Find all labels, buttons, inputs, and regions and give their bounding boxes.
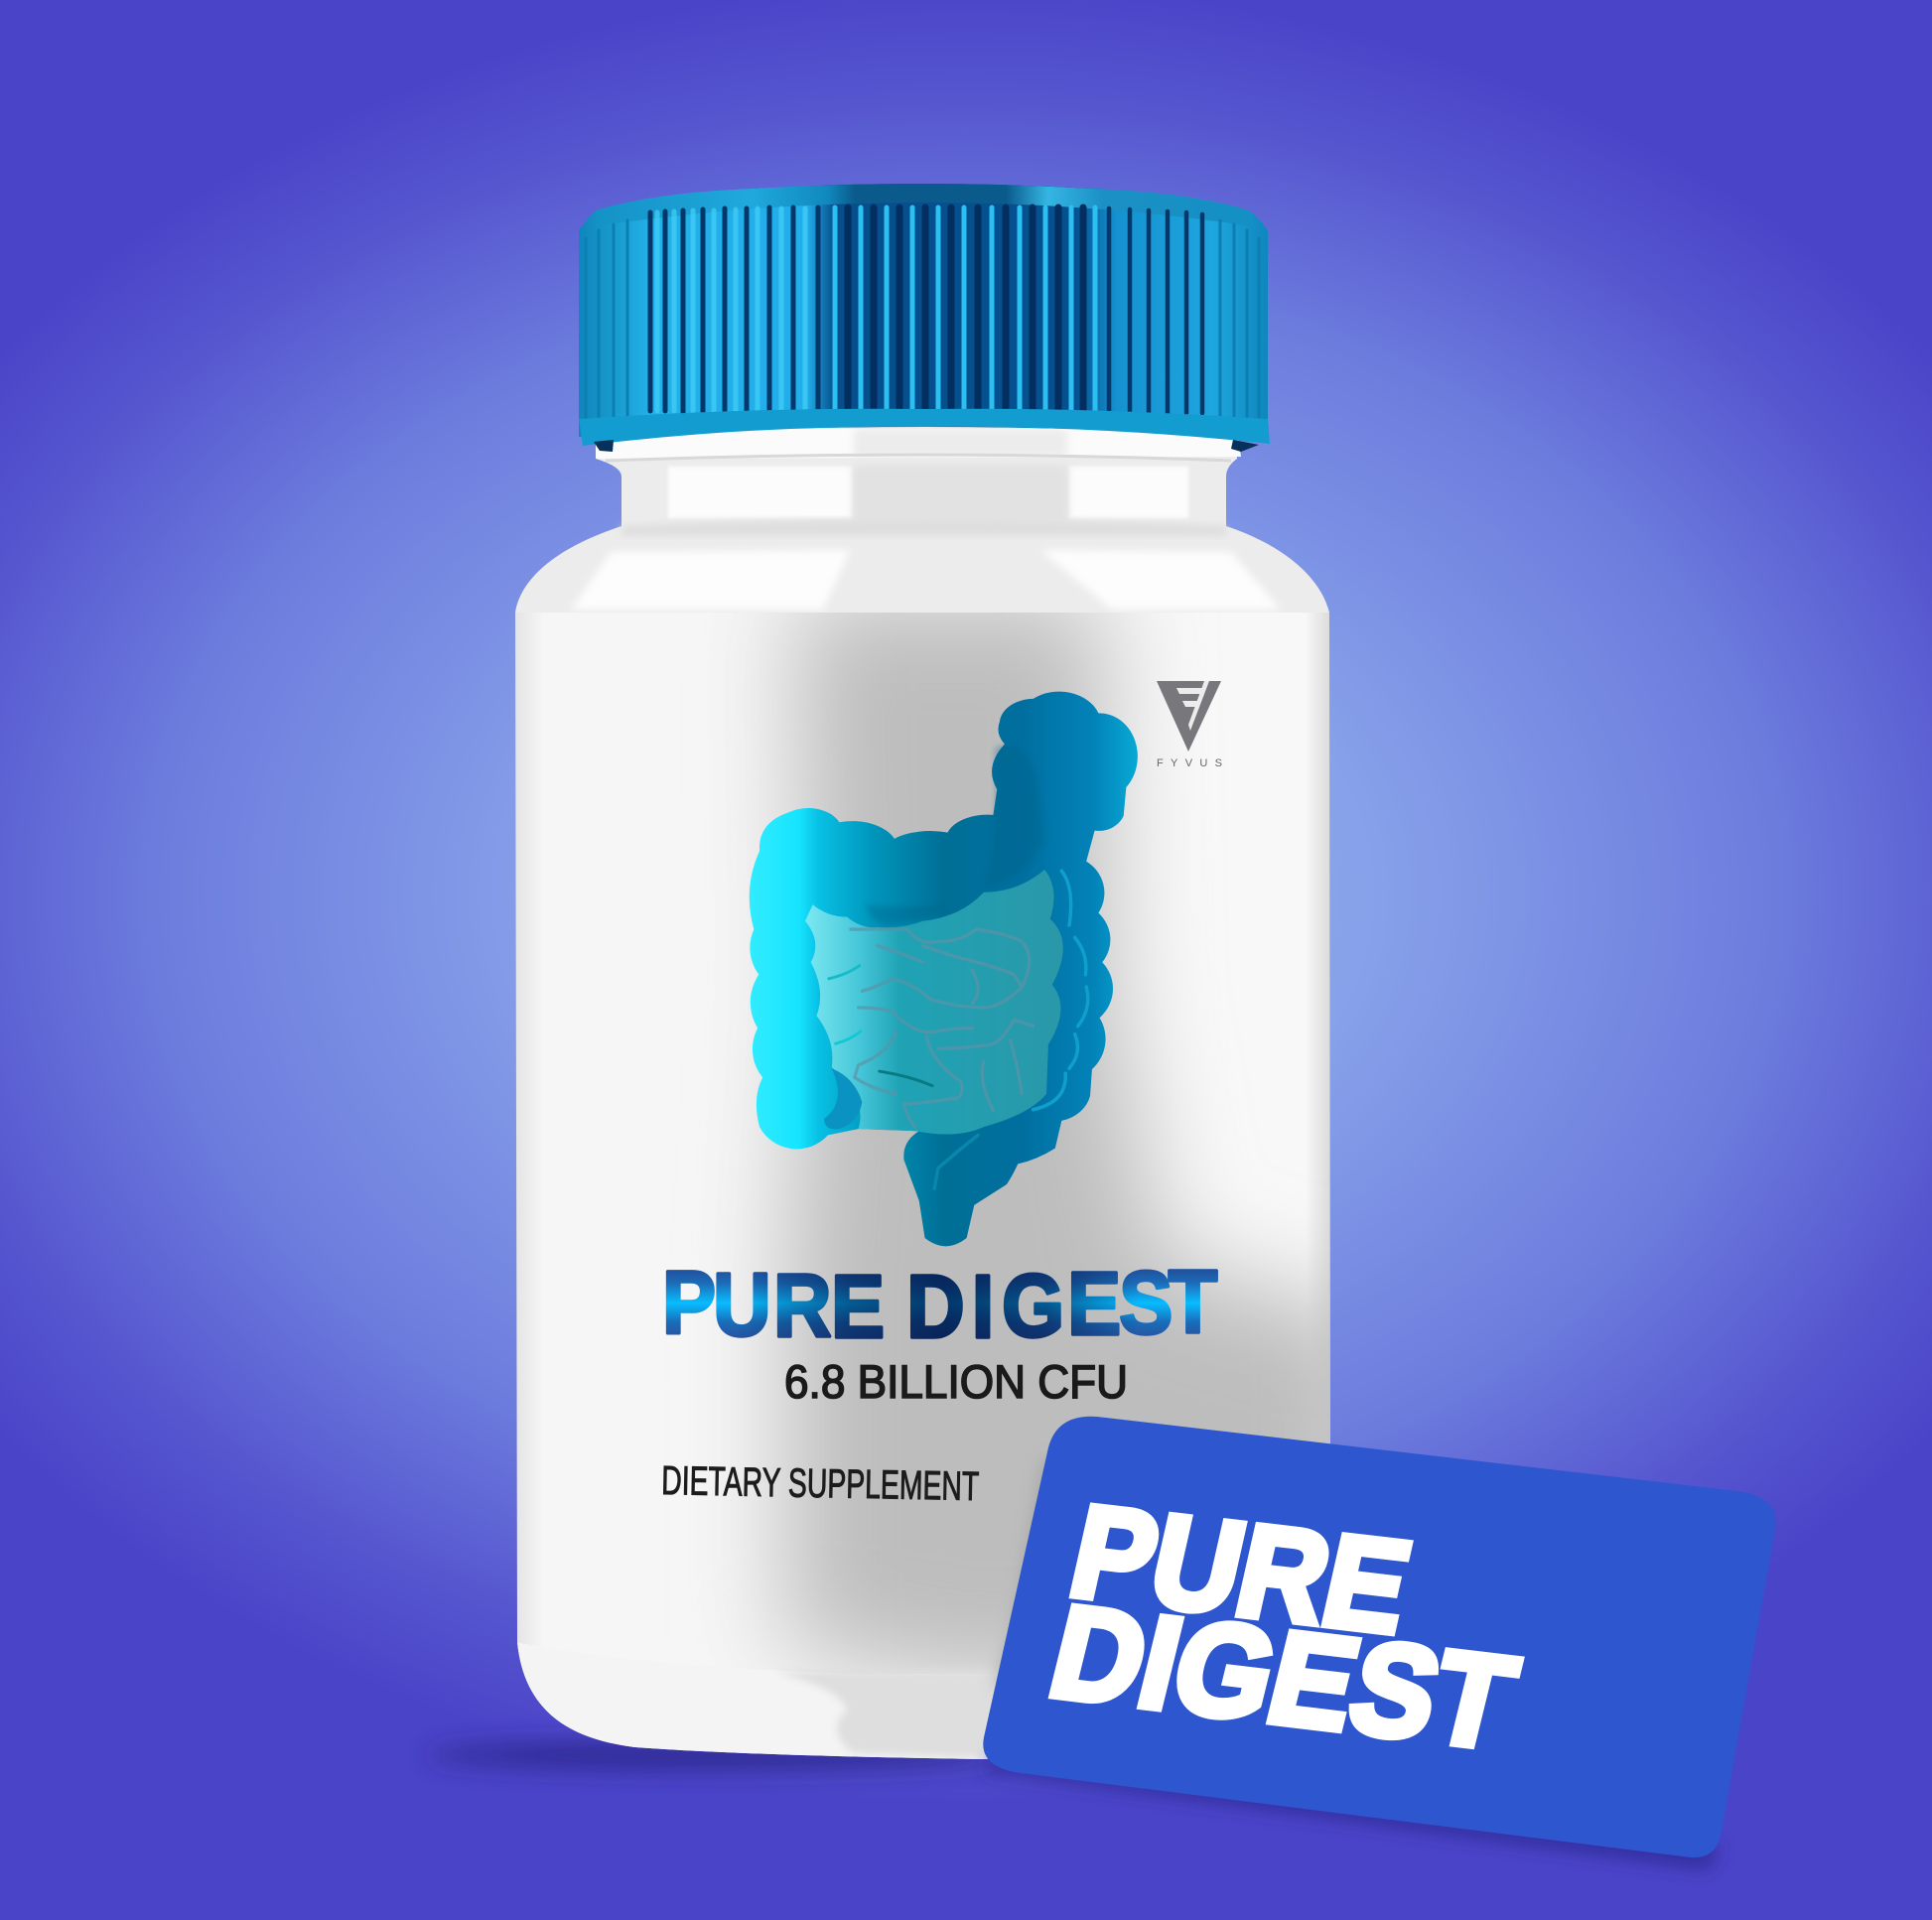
intestine silhouette: [750, 692, 1138, 1246]
bottle shadow: [427, 1740, 1003, 1770]
card word: digest: DIGEST: [1037, 1579, 1528, 1777]
bottle body: [515, 596, 1370, 1777]
product title: PURE DIGEST: [662, 1252, 1217, 1357]
intestine dark spots: [829, 966, 932, 1086]
strength line: 6.8 BILLION CFU: [784, 1355, 1128, 1408]
blue card: [983, 1417, 1776, 1857]
card shadow: [983, 1757, 1723, 1871]
veins: [851, 929, 1034, 1127]
descending colon shading: [934, 871, 1088, 1188]
colon highlights: [866, 746, 1044, 925]
dietary supplement label: DIETARY SUPPLEMENT: [661, 1457, 980, 1509]
bottle cap: [579, 183, 1270, 452]
card word: pure: PURE: [1059, 1478, 1423, 1661]
cecum shadow: [824, 1068, 862, 1129]
brand name: FYVUS: [1157, 757, 1222, 769]
intestine illustration: [750, 692, 1138, 1246]
bottle neck and shoulder: [515, 422, 1329, 613]
small intestine: [805, 870, 1063, 1135]
brand logo: [1157, 681, 1222, 769]
card shadow on bottle: [993, 1459, 1062, 1688]
